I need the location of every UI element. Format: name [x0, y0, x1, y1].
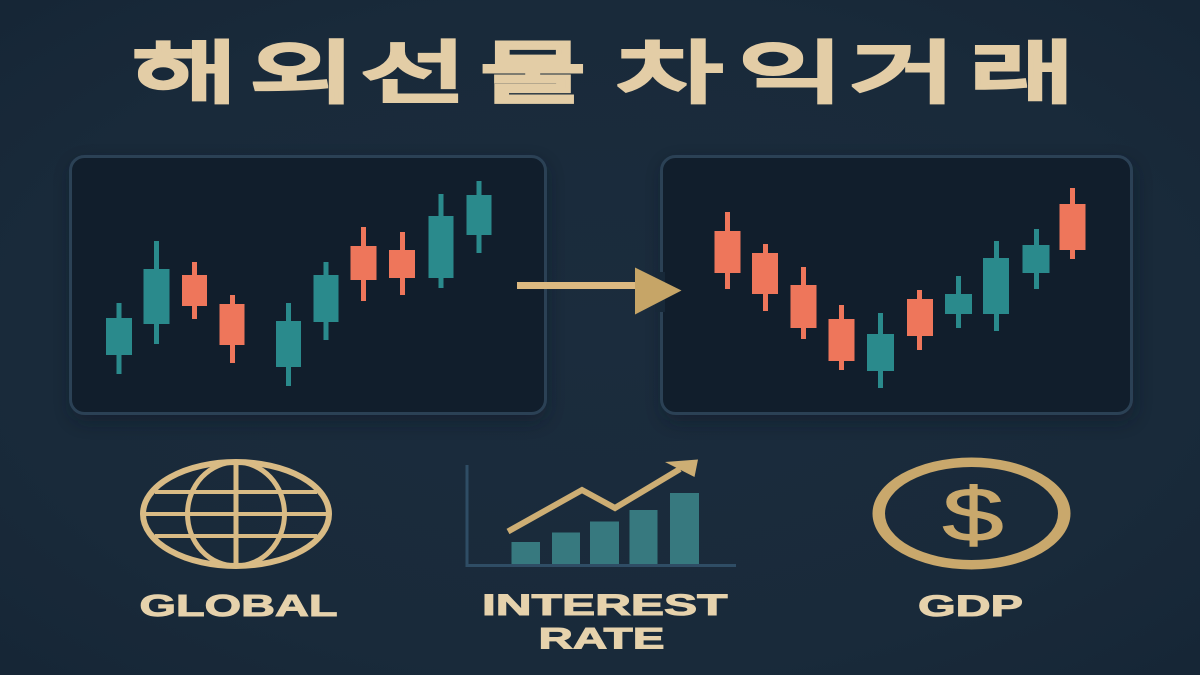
- label: GDP: GDP: [918, 590, 1023, 623]
- candle 3: [182, 262, 207, 319]
- icon: globe: [143, 462, 329, 566]
- left panel frame: [70, 156, 546, 414]
- icon: GDP dollar coin: [872, 458, 1070, 570]
- arrow between panels: [517, 268, 682, 314]
- candle 7: [350, 227, 376, 301]
- candle 10: [1060, 188, 1086, 259]
- candle 2: [144, 241, 170, 344]
- panel: right candlestick chart: [662, 156, 1134, 421]
- candle 4: [828, 305, 854, 370]
- candle 5: [867, 313, 894, 388]
- candle 3: [790, 267, 816, 339]
- candle 1: [106, 303, 132, 374]
- candle 9: [1022, 229, 1050, 289]
- dollar sign: $: [942, 473, 1004, 558]
- chart axes: [467, 465, 736, 566]
- candle 7: [945, 276, 972, 328]
- candle 10: [466, 181, 492, 253]
- candle 6: [314, 262, 338, 340]
- panel: left candlestick chart: [70, 156, 546, 421]
- candle 2: [752, 244, 778, 311]
- bars: [512, 493, 699, 564]
- candle 4: [220, 295, 244, 363]
- right panel frame: [662, 156, 1132, 414]
- candle 1: [714, 212, 740, 289]
- label: GLOBAL: GLOBAL: [140, 588, 338, 623]
- candle 5: [276, 303, 301, 386]
- candle 8: [983, 241, 1009, 331]
- label: INTEREST RATE: RATE: [538, 622, 664, 656]
- title: 해외선물 차익거래: [131, 37, 1076, 111]
- icon: interest rate bar chart: [467, 460, 736, 566]
- candle 6: [907, 290, 933, 350]
- label: INTEREST RATE: [482, 589, 728, 656]
- candle 8: [389, 232, 415, 295]
- candle 9: [428, 194, 454, 288]
- trend arrow: [508, 460, 698, 532]
- label: INTEREST RATE: INTEREST: [482, 589, 728, 622]
